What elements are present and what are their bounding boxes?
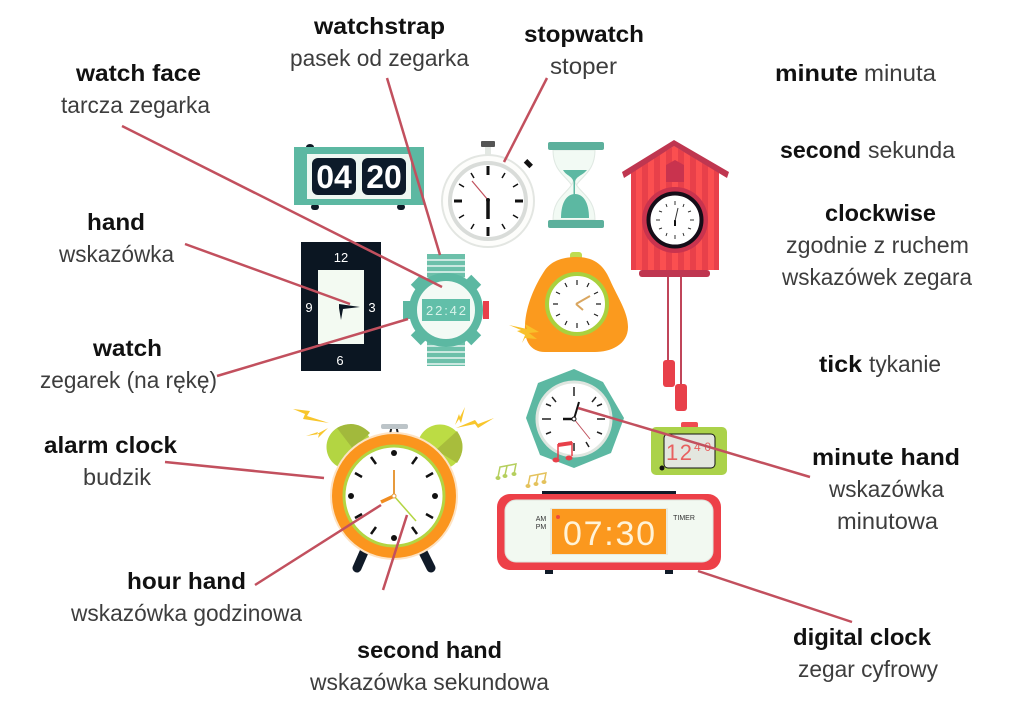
icon: flip clock: 04 xyxy=(316,159,352,195)
label: watchstrap: pasek od zegarka xyxy=(290,45,469,71)
icon: rectangular wall clock: 6 xyxy=(336,353,344,368)
label: digital clock: zegar cyfrowy xyxy=(798,656,938,682)
icon: digital wrist watch xyxy=(403,254,489,366)
label: hour hand: hour hand xyxy=(127,568,246,594)
icon: digital clock: AM xyxy=(536,516,546,523)
label: watch face: tarcza zegarka xyxy=(61,92,210,118)
label: clockwise: wskazówek zegara xyxy=(781,264,972,290)
label: watchstrap: watchstrap xyxy=(313,13,445,39)
label: minute hand: minute hand xyxy=(812,444,960,470)
label: watchstrap xyxy=(290,13,469,71)
icon: digital clock: PM xyxy=(536,524,546,531)
label: hand: hand xyxy=(87,209,145,235)
label: stopwatch xyxy=(524,21,644,79)
label: watch: watch xyxy=(92,335,162,361)
icon: music notes xyxy=(496,464,546,488)
icon: rectangular wall clock: 9 xyxy=(305,300,313,315)
icon: rectangular wall clock: 12 xyxy=(334,250,348,265)
icon: flip clock: 20 xyxy=(366,159,402,195)
icon: stopwatch xyxy=(442,141,534,247)
icon: rectangular wall clock: 3 xyxy=(368,300,376,315)
label: hour hand: wskazówka godzinowa xyxy=(70,600,302,626)
label: tick: tick xyxy=(819,351,862,377)
label: hand xyxy=(58,209,174,267)
icon: digital clock: 07:30 xyxy=(563,515,655,553)
label: digital clock: digital clock xyxy=(793,624,931,650)
label: minute hand xyxy=(812,444,960,534)
label: clockwise: clockwise xyxy=(825,200,936,226)
label: second: second xyxy=(780,137,861,163)
label: stopwatch: stopwatch xyxy=(524,21,644,47)
label: digital clock xyxy=(793,624,938,682)
label: tick xyxy=(819,351,941,377)
icon: digital clock: TIMER xyxy=(673,515,695,522)
icon: small digital timer: 40 xyxy=(694,440,711,454)
icon: orange alarm clock xyxy=(509,252,628,352)
icon: small digital timer: 12 xyxy=(666,440,692,465)
label: hand: wskazówka xyxy=(58,241,174,267)
label: hour hand xyxy=(70,568,302,626)
label: watch: zegarek (na rękę) xyxy=(40,367,217,393)
label: second hand xyxy=(309,637,549,695)
label: tick: tykanie xyxy=(869,351,941,377)
label: alarm clock: budzik xyxy=(83,464,152,490)
icon: digital wrist watch: 22:42 xyxy=(426,303,466,318)
label: watch face xyxy=(61,60,210,118)
label: alarm clock xyxy=(44,432,177,490)
icon: flip clock xyxy=(294,144,424,210)
label: watch xyxy=(40,335,217,393)
label: minute xyxy=(775,60,936,86)
icon: cuckoo clock xyxy=(622,140,729,411)
label: stopwatch: stoper xyxy=(550,53,617,79)
icon: digital clock xyxy=(497,491,721,574)
label: second xyxy=(780,137,955,163)
icon: small digital timer xyxy=(651,422,727,475)
label: minute hand: wskazówka xyxy=(828,476,944,502)
label: clockwise: zgodnie z ruchem xyxy=(786,232,969,258)
label: clockwise xyxy=(781,200,972,290)
icon: alarm clock xyxy=(293,407,494,568)
label: minute: minuta xyxy=(864,60,936,86)
red leader lines xyxy=(122,78,852,622)
label: alarm clock: alarm clock xyxy=(44,432,177,458)
icon: octagonal wall clock xyxy=(526,369,624,468)
label: minute hand: minutowa xyxy=(837,508,938,534)
icon: music note xyxy=(552,441,572,462)
label: second hand: wskazówka sekundowa xyxy=(309,669,549,695)
label: second hand: second hand xyxy=(357,637,502,663)
label: watch face: watch face xyxy=(75,60,201,86)
label: minute: minute xyxy=(775,60,858,86)
icon: hourglass xyxy=(548,142,604,228)
label: second: sekunda xyxy=(868,137,955,163)
icon: rectangular wall clock xyxy=(301,242,381,371)
